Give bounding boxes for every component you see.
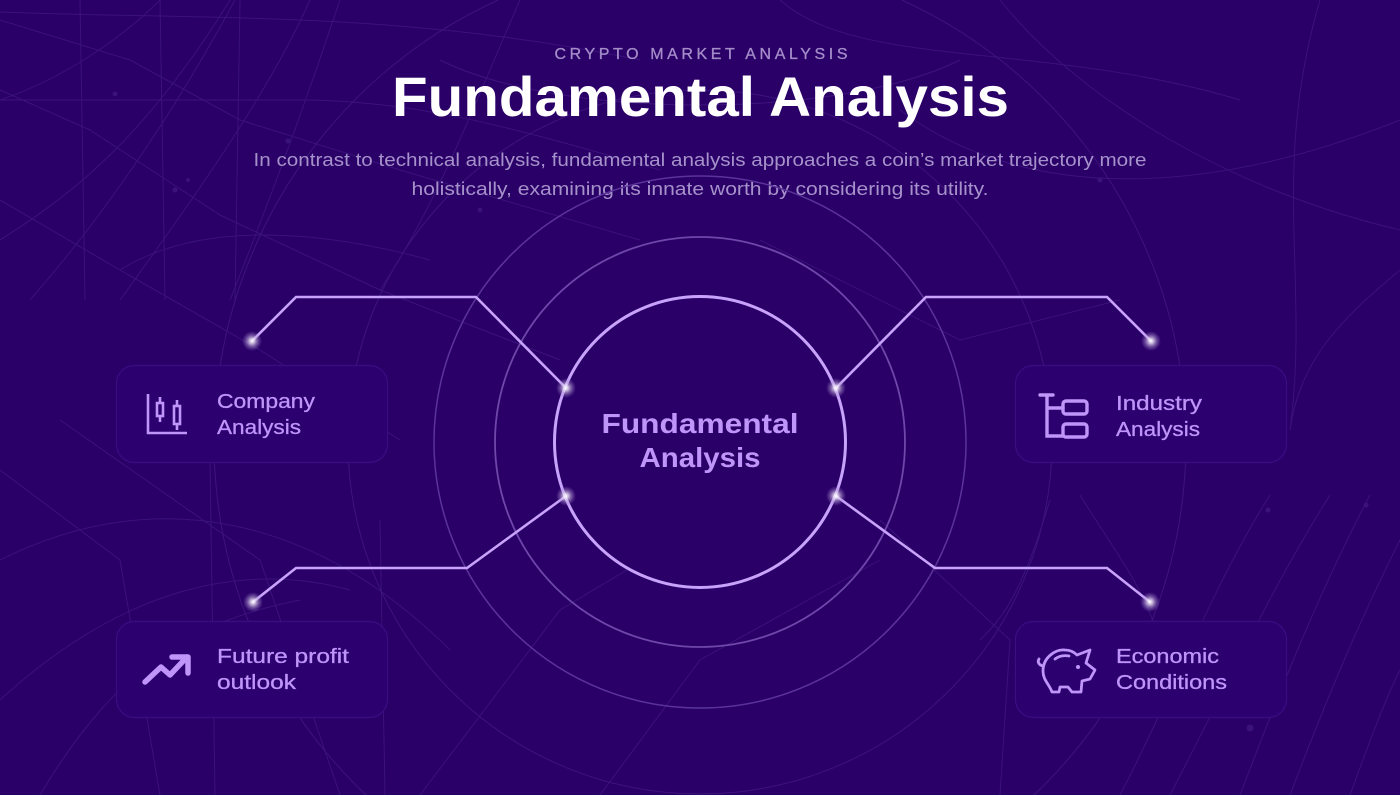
icon: piggy bank — [1038, 650, 1095, 692]
panel: company analysis — [116, 366, 388, 462]
label: industry analysis — [1116, 392, 1203, 441]
central circle — [554, 296, 846, 588]
icon: candlestick chart — [148, 394, 187, 433]
label: future profit outlook — [217, 645, 349, 694]
eyebrow heading: CRYPTO MARKET ANALYSIS — [554, 46, 848, 63]
label: future profit outlook: Future profit — [217, 645, 349, 668]
panel: industry analysis — [1016, 366, 1286, 462]
label: company analysis: Analysis — [217, 416, 301, 439]
label: economic conditions: Economic — [1116, 645, 1219, 668]
label: company analysis: Company — [217, 390, 316, 413]
label: future profit outlook: outlook — [217, 671, 297, 694]
connector: company analysis — [242, 297, 576, 398]
central circle: Fundamental — [602, 408, 798, 439]
connector: industry analysis — [826, 297, 1161, 398]
title: Fundamental Analysis — [392, 65, 1009, 128]
connector: economic conditions — [826, 486, 1160, 612]
panel: economic conditions — [1016, 622, 1286, 718]
icon: hierarchy tree — [1040, 395, 1087, 437]
description text: In contrast to technical analysis, fundamental analysis approaches a coin’s market trajectory more — [254, 149, 1146, 170]
icon: trending up arrow — [145, 657, 188, 682]
label: industry analysis: Analysis — [1116, 418, 1200, 441]
description text — [254, 149, 1146, 199]
central circle: Analysis — [640, 442, 760, 473]
label: company analysis — [217, 390, 316, 439]
label: economic conditions: Conditions — [1116, 671, 1227, 694]
label: economic conditions — [1116, 645, 1227, 694]
concentric rings — [434, 176, 966, 708]
panel: future profit outlook — [116, 622, 388, 718]
description text: holistically, examining its innate worth by considering its utility. — [412, 178, 988, 199]
connector: future profit outlook — [243, 486, 576, 612]
icon detail: pig eye — [1076, 665, 1080, 669]
label: industry analysis: Industry — [1116, 392, 1203, 415]
